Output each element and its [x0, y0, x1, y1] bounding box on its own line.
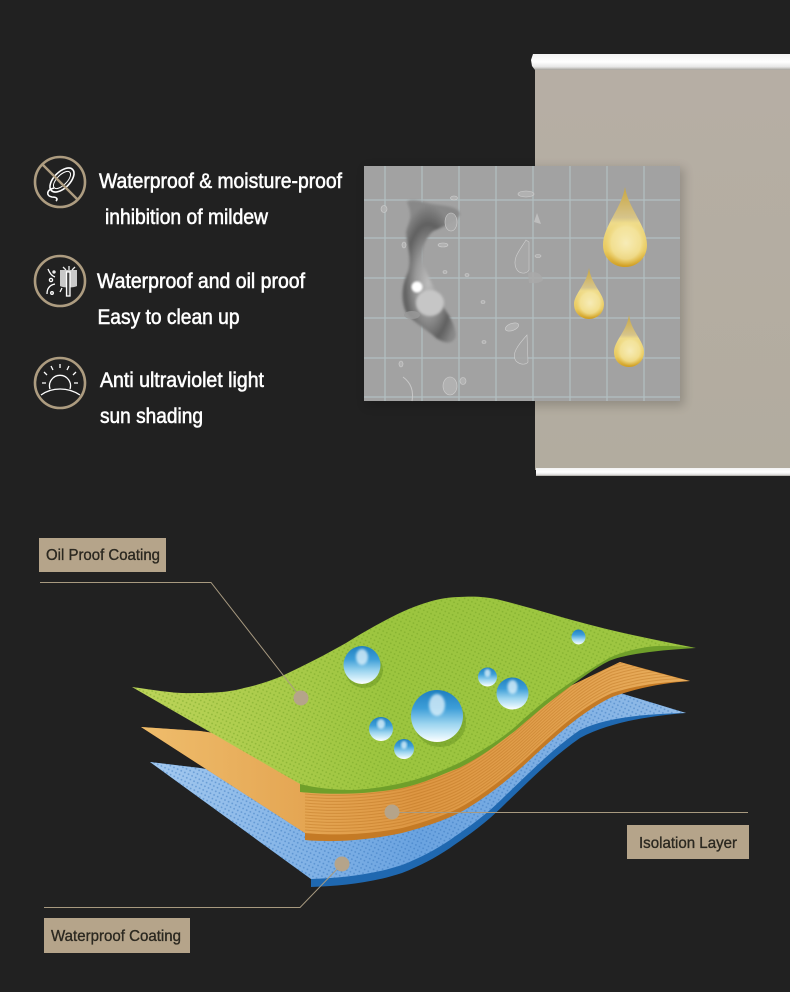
- feature: mildew: [35, 157, 342, 207]
- water blob: [402, 200, 460, 343]
- blind fabric: [535, 69, 790, 470]
- feature: UV: [35, 358, 264, 408]
- icon: cleaning brush: [35, 256, 85, 306]
- label: Isolation Layer: [639, 835, 738, 852]
- top roller rail: [531, 54, 790, 70]
- text: feature 1: Waterproof & moisture-proof: [99, 170, 342, 193]
- label: [627, 825, 749, 859]
- text: feature 3: Anti ultraviolet light: [100, 369, 264, 392]
- label: [39, 538, 166, 572]
- leader line: [392, 812, 748, 814]
- label: [44, 918, 190, 953]
- text: feature 3 line 2: sun shading: [100, 405, 203, 428]
- feature: easy clean: [35, 256, 305, 306]
- text: feature 2 line 2: Easy to clean up: [98, 306, 240, 329]
- panel: waterproof tile sample: [364, 166, 684, 406]
- water droplets: [344, 630, 586, 759]
- icon: sun: [35, 358, 85, 408]
- leader line: [44, 864, 342, 908]
- blue layer: [150, 693, 686, 887]
- green layer: [132, 597, 696, 794]
- roller blind product: [531, 54, 790, 476]
- layered fabric diagram: [132, 597, 696, 887]
- small water droplets: [381, 191, 543, 395]
- oil drops: [574, 187, 647, 367]
- text: feature 1 line 2: inhibition of mildew: [105, 206, 269, 229]
- marker: [334, 856, 350, 872]
- marker: [294, 690, 308, 706]
- callout: isolation layer: [384, 804, 749, 859]
- leader line: [40, 582, 301, 698]
- callout: waterproof coating: [44, 856, 350, 953]
- marker: [384, 804, 400, 820]
- bottom rail: [536, 468, 790, 476]
- orange layer: [141, 662, 690, 842]
- label: Waterproof Coating: [51, 928, 181, 945]
- icon: no bacteria: [35, 157, 85, 207]
- text: feature 2: Waterproof and oil proof: [97, 270, 305, 293]
- label: Oil Proof Coating: [46, 547, 160, 564]
- callout: oil proof coating: [39, 538, 308, 706]
